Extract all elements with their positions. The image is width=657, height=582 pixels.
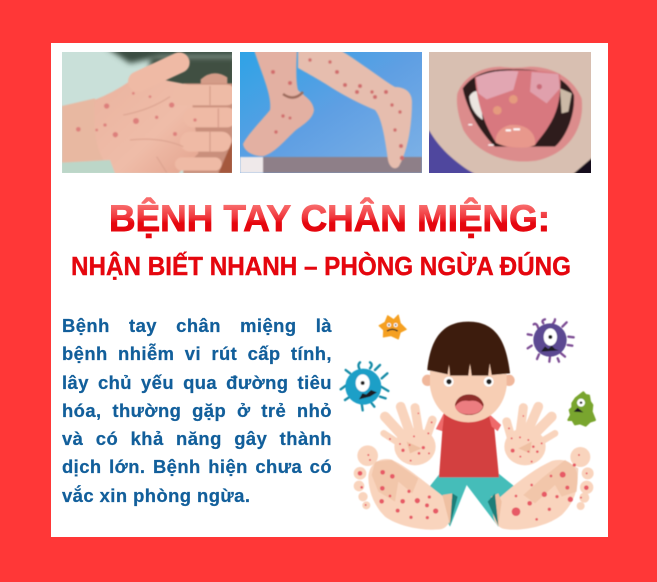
photo: sores on tongue <box>429 52 591 173</box>
shirt <box>436 412 501 477</box>
inner legs <box>442 493 452 525</box>
icon: green virus <box>568 392 595 426</box>
hands <box>384 407 555 445</box>
toes <box>354 445 594 510</box>
head <box>422 375 433 386</box>
title: BỆNH TAY CHÂN MIỆNG: <box>109 197 550 239</box>
photo: rash on feet and legs <box>240 50 422 173</box>
rash spots <box>358 412 589 521</box>
eyes <box>444 377 454 387</box>
photo: rash on hand <box>62 47 237 173</box>
illustration: child with rash and viruses <box>341 315 595 530</box>
text block: disease description: lây chủ yếu qua đường tiêu <box>62 372 332 393</box>
text block: disease description: vắc xin phòng ngừa. <box>62 485 250 506</box>
icon: purple virus <box>528 319 574 362</box>
icon: child <box>354 322 594 530</box>
text block: disease description: Bệnh tay chân miệng là <box>62 315 332 336</box>
subtitle: NHẬN BIẾT NHANH – PHÒNG NGỪA ĐÚNG <box>71 251 571 281</box>
text block: disease description: và có khả năng gây thành <box>62 428 332 449</box>
text block: disease description: bệnh nhiễm vi rút cấp tính, <box>62 343 332 364</box>
hair <box>427 322 510 376</box>
text block: disease description <box>62 315 332 506</box>
panel: white card <box>51 43 608 537</box>
feet <box>368 459 452 530</box>
icon: blue virus <box>341 362 388 410</box>
text block: disease description: dịch lớn. Bệnh hiện chưa có <box>62 456 332 477</box>
shorts <box>428 473 518 527</box>
text block: disease description: hóa, thường gặp ở trẻ nhỏ <box>62 400 332 421</box>
mouth <box>455 394 484 415</box>
icon: orange virus <box>379 315 406 339</box>
artwork: photos, title and illustration <box>62 52 597 530</box>
